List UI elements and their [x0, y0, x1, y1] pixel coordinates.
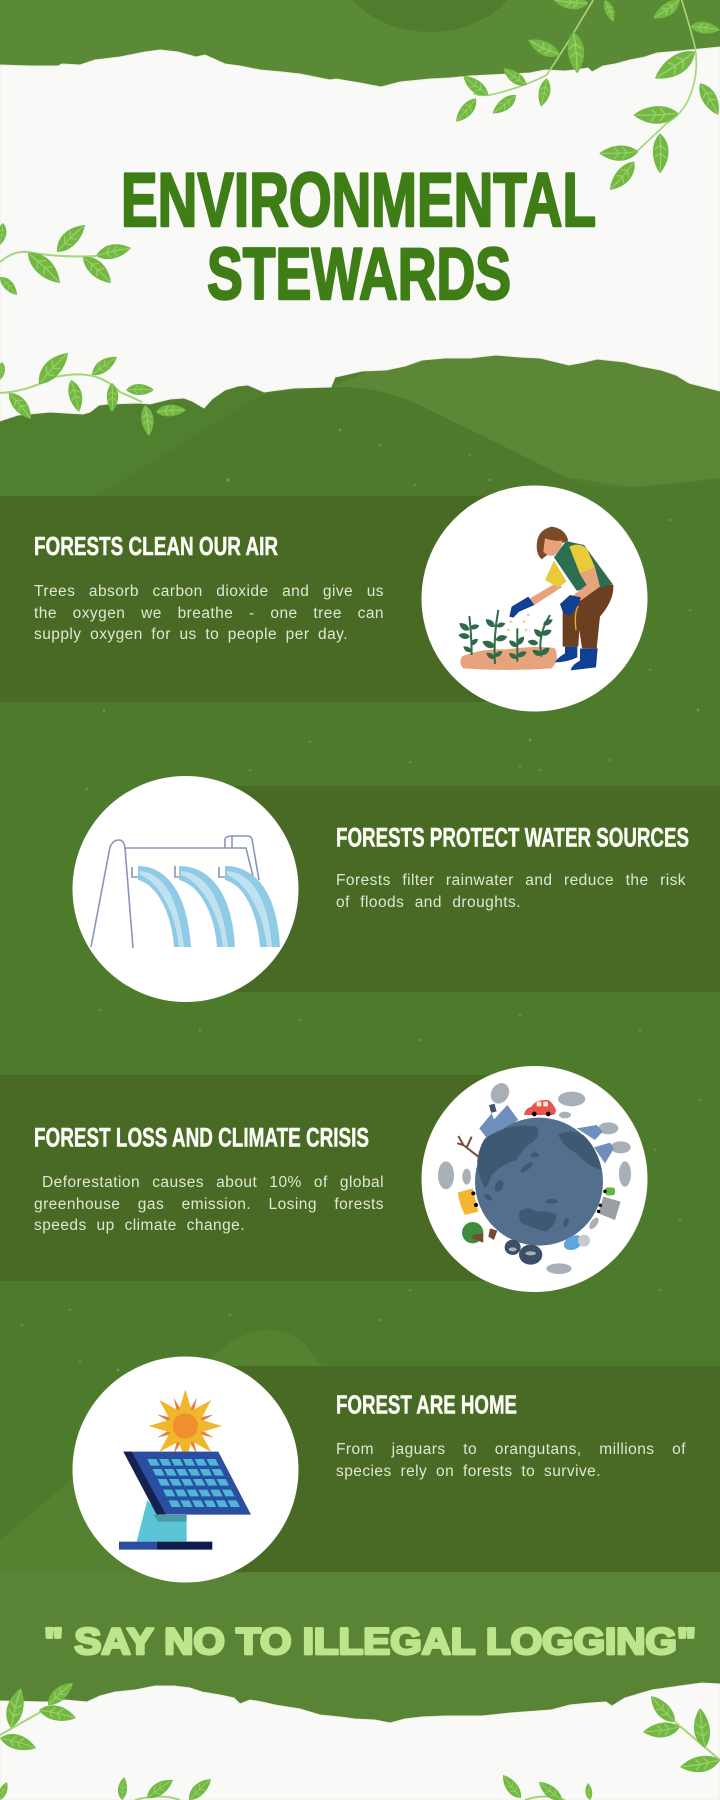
top green band	[0, 0, 720, 100]
text: forests protect water sources: Forests filter rainwater and reduce the risk	[336, 872, 686, 889]
panel: forests protect water sources	[225, 786, 720, 992]
text: forests clean our air	[34, 583, 384, 643]
heading: forests clean our air: FORESTS CLEAN OUR AIR	[34, 531, 278, 561]
text: forests protect water sources: of floods and droughts.	[336, 894, 521, 910]
torn paper: upper sheet	[0, 47, 720, 421]
text: forest loss and climate crisis: speeds up climate change.	[34, 1217, 245, 1234]
vine: top right hanging leaves	[456, 0, 720, 190]
text: forest loss and climate crisis: greenhouse gas emission. Losing forests	[34, 1196, 384, 1212]
text: forest are home	[336, 1441, 686, 1480]
water streams	[138, 866, 280, 947]
upper hills	[0, 350, 720, 500]
callout: say no to illegal logging: " SAY NO TO ILLEGAL LOGGING"	[44, 1621, 696, 1662]
panel: forest loss and climate crisis	[0, 1075, 490, 1281]
vine: bottom centre left	[0, 1777, 211, 1800]
text: forest loss and climate crisis: Deforestation causes about 10% of global	[42, 1174, 384, 1191]
text: forests clean our air: Trees absorb carbon dioxide and give us	[34, 583, 384, 600]
text: forests clean our air: supply oxygen for us to people per day.	[34, 626, 348, 643]
panel: forest are home	[225, 1366, 720, 1572]
lower hill	[0, 1330, 720, 1733]
icon: polluted earth globe	[422, 1066, 648, 1292]
text: forest are home: species rely on forests to survive.	[336, 1462, 601, 1480]
vine: bottom left	[0, 1683, 76, 1750]
icon: dam with water flowing	[72, 776, 298, 1002]
paper specks	[21, 429, 701, 1371]
text: forest loss and climate crisis	[34, 1174, 384, 1234]
panel: forests clean our air	[0, 496, 490, 702]
vine: bottom centre right	[502, 1775, 592, 1800]
red car	[524, 1100, 556, 1116]
torn paper: lower sheet	[0, 1683, 720, 1800]
text: forest are home: From jaguars to orangutans, millions of	[336, 1441, 686, 1458]
text: forests protect water sources	[336, 872, 686, 910]
vine: bottom right	[643, 1696, 720, 1772]
text: forests clean our air: the oxygen we breathe - one tree can	[34, 604, 384, 622]
icon: solar panel and sun	[72, 1356, 298, 1582]
vine: above the hills	[0, 353, 186, 436]
heading: forest loss and climate crisis: FOREST LOSS AND CLIMATE CRISIS	[34, 1122, 369, 1152]
dam structure	[91, 836, 259, 948]
icon: gardener planting seedlings	[422, 486, 648, 712]
title	[121, 158, 596, 315]
heading: forest are home: FOREST ARE HOME	[336, 1390, 517, 1420]
vine: left side beside title	[0, 223, 131, 295]
title: STEWARDS	[207, 234, 511, 315]
